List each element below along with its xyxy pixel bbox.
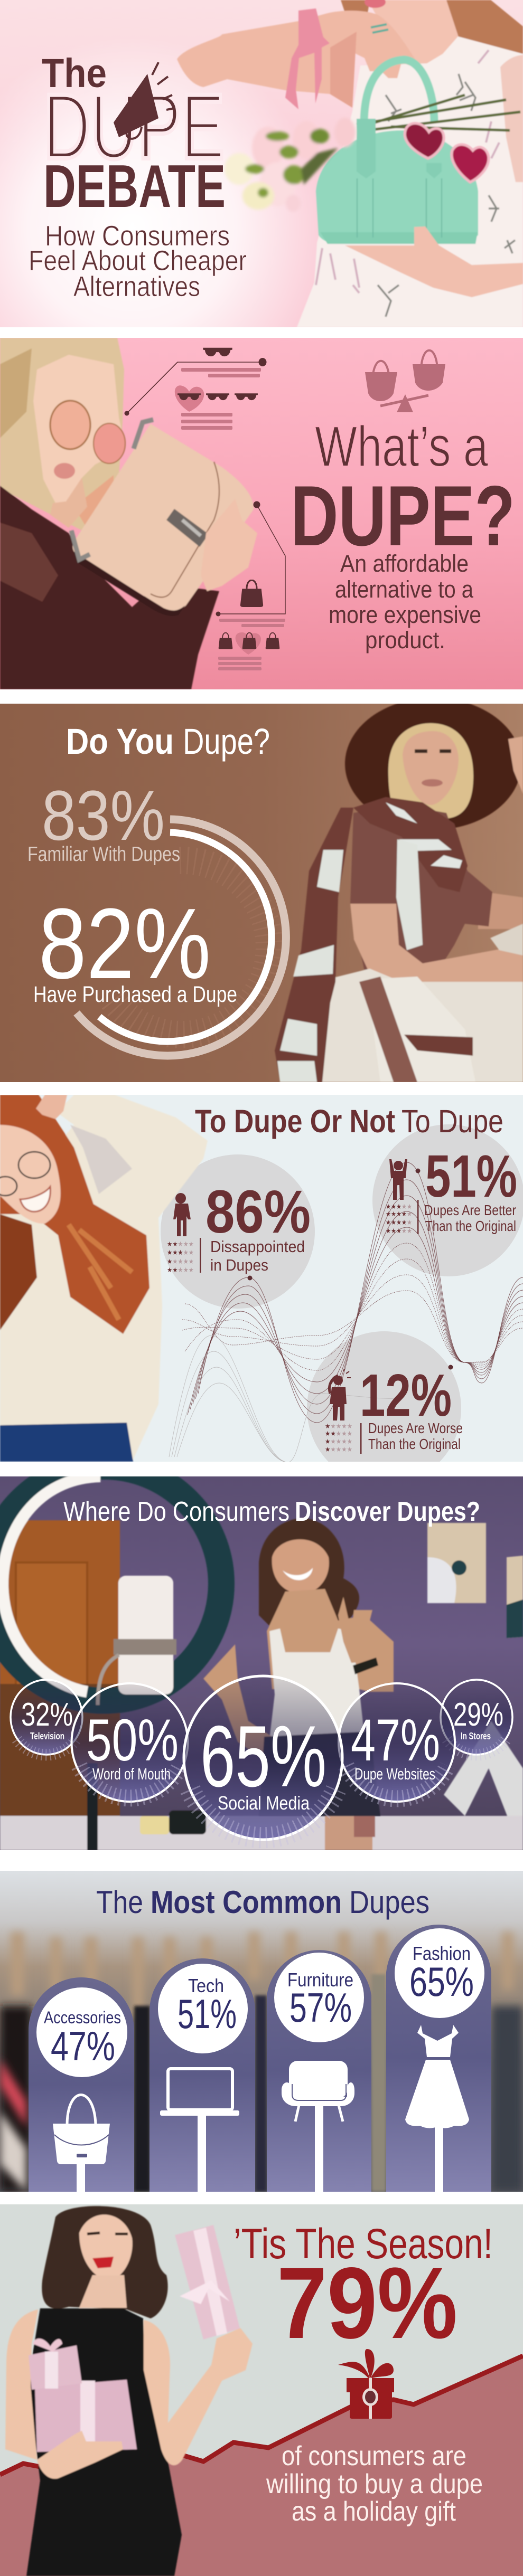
stat: 51% better: ★★★★★ <box>386 1203 412 1211</box>
photo: woman in hat and scarf <box>275 698 523 1082</box>
bubble: television 32%: 32% <box>21 1697 73 1733</box>
subtitle: Feel About Cheaper <box>29 245 247 277</box>
photo: woman holding gifts <box>5 2206 253 2576</box>
photo: carnation bouquet <box>225 118 356 212</box>
heading <box>234 2220 493 2360</box>
icon: megaphone <box>114 62 174 139</box>
purple room background <box>0 1476 523 1850</box>
stat: 12% worse: Than the Original <box>368 1436 461 1452</box>
column: fashion 65% <box>386 1925 491 2192</box>
title: DEBATE <box>43 153 226 220</box>
heading: Dupes <box>349 1884 429 1920</box>
column: accessories 47% <box>29 1977 134 2192</box>
stat: 12% worse <box>325 1362 463 1454</box>
stat: 86% disappointed: ★★★★★ <box>167 1266 194 1274</box>
heading: 79% <box>277 2246 457 2360</box>
stat: 12% worse: ★★★★★ <box>325 1430 352 1438</box>
photo: woman in sunglasses with peach bag <box>0 338 257 689</box>
heading <box>295 425 511 546</box>
photo: woman holding teal handbag <box>177 0 523 327</box>
subtitle: Alternatives <box>73 271 200 302</box>
heading: Where Do Consumers <box>63 1497 289 1527</box>
bubble: dupe websites 47%: 47% <box>351 1707 440 1773</box>
grey background <box>0 2204 523 2576</box>
title: DUPE <box>43 75 225 178</box>
stat description: willing to buy a dupe <box>266 2469 483 2499</box>
panel: to dupe or not <box>0 1095 523 1485</box>
photo: room with ring light and table <box>0 1466 523 1850</box>
panel: tis the season <box>0 2204 523 2576</box>
stat: 51% better: ★★★★★ <box>386 1227 412 1235</box>
panel: most common dupes <box>0 1871 523 2192</box>
stat: 51% better: ★★★★★ <box>386 1210 412 1218</box>
pale background <box>0 1095 523 1462</box>
photo: laughing woman with red hair <box>0 1095 208 1462</box>
column: tech 51%: Tech <box>188 1975 224 1996</box>
subtitle <box>31 225 246 297</box>
pink background <box>0 338 523 689</box>
stat: 12% worse: ★★★★★ <box>325 1438 352 1446</box>
bubble: dupe websites 47% <box>339 1683 455 1802</box>
dupe diagram: sunglasses comparison <box>125 348 266 430</box>
stat: 86% disappointed: 86% <box>206 1178 311 1246</box>
stat: 12% worse: Dupes Are Worse <box>368 1420 463 1436</box>
intro background <box>0 0 523 327</box>
heading <box>63 1497 480 1527</box>
stat: 86% disappointed: ★★★★★ <box>167 1258 194 1266</box>
wave markers <box>247 1169 453 1369</box>
stat: 86% disappointed: in Dupes <box>210 1256 268 1274</box>
panel: what's a dupe <box>0 338 523 689</box>
stat: 12% worse: 12% <box>360 1362 452 1428</box>
bubble: word of mouth 50%: 50% <box>86 1707 179 1773</box>
stat: 83% familiar: 83% <box>42 776 165 855</box>
bubble: social media 65%: 65% <box>200 1708 326 1805</box>
stat: 86% disappointed <box>167 1178 311 1274</box>
column: furniture 57%: Furniture <box>287 1969 353 1991</box>
stat: 86% disappointed: Dissappointed <box>210 1237 305 1256</box>
heading: To Dupe <box>401 1103 503 1139</box>
blurred clothing rack background <box>0 1871 523 2192</box>
bubble: television 32% <box>11 1680 82 1755</box>
bubble: in stores 29% <box>441 1680 512 1755</box>
rising line area <box>0 2356 523 2576</box>
icon: gift box <box>338 2349 394 2419</box>
definition text: An affordable <box>340 550 469 577</box>
column: furniture 57% <box>267 1950 371 2192</box>
title <box>42 58 224 207</box>
definition text <box>329 550 481 654</box>
definition text: product. <box>365 627 445 654</box>
panel: where consumers discover dupes <box>0 1466 523 1850</box>
column: fashion 65%: 65% <box>409 1958 474 2005</box>
column: tech 51%: 51% <box>178 1991 237 2037</box>
heading: Most Common <box>151 1884 342 1920</box>
panel: do you dupe <box>0 698 523 1082</box>
title: The <box>42 51 107 96</box>
heading: Do You <box>66 721 174 762</box>
stat: 51% better: ★★★★★ <box>386 1219 412 1227</box>
grey circles <box>161 1124 523 1485</box>
definition text: alternative to a <box>335 576 474 603</box>
heading: Dupe? <box>183 721 270 762</box>
brown background <box>0 704 523 1082</box>
stat description <box>266 2441 483 2527</box>
icon: balance scale with bags <box>365 351 445 412</box>
stat: 12% worse: ★★★★★ <box>325 1446 352 1454</box>
stat: 12% worse: ★★★★★ <box>325 1423 352 1431</box>
heading: To Dupe Or Not <box>195 1103 395 1139</box>
column: accessories 47%: Accessories <box>44 2008 121 2027</box>
photo: smiling woman <box>203 1518 394 1816</box>
stat: 83% familiar: Familiar With Dupes <box>27 843 180 866</box>
stat description: of consumers are <box>282 2441 466 2471</box>
wave line chart <box>169 1162 523 1462</box>
radial progress arcs <box>77 819 286 1056</box>
heading <box>96 1884 429 1920</box>
definition text: more expensive <box>329 601 481 628</box>
stat: 86% disappointed: ★★★★★ <box>167 1240 194 1248</box>
panel: intro <box>0 0 523 327</box>
stat: 82% purchased: 82% <box>39 888 211 1000</box>
bubble: dupe websites 47%: Dupe Websites <box>354 1765 435 1783</box>
bubble: social media 65%: Social Media <box>218 1792 310 1814</box>
column: furniture 57%: 57% <box>289 1984 352 2031</box>
bubble: in stores 29%: In Stores <box>461 1731 491 1741</box>
column: fashion 65%: Fashion <box>413 1943 471 1964</box>
stat description: as a holiday gift <box>292 2496 456 2527</box>
dupe diagram: handbag comparison <box>216 501 285 670</box>
bubble: in stores 29%: 29% <box>453 1697 503 1733</box>
column: accessories 47%: 47% <box>51 2023 115 2069</box>
bubble: word of mouth 50%: Word of Mouth <box>92 1765 171 1783</box>
bubble: social media 65% <box>184 1676 342 1840</box>
heading: Discover Dupes? <box>295 1497 480 1527</box>
stat: 82% purchased: Have Purchased a Dupe <box>33 982 237 1007</box>
heading: The <box>96 1884 143 1920</box>
column: tech 51% <box>150 1958 255 2192</box>
stat: 51% better <box>386 1143 517 1235</box>
subtitle: How Consumers <box>45 220 230 252</box>
stat: 86% disappointed: ★★★★★ <box>167 1249 194 1257</box>
bubble: television 32%: Television <box>30 1731 64 1741</box>
heading <box>66 721 270 762</box>
bubble: word of mouth 50% <box>72 1683 188 1802</box>
